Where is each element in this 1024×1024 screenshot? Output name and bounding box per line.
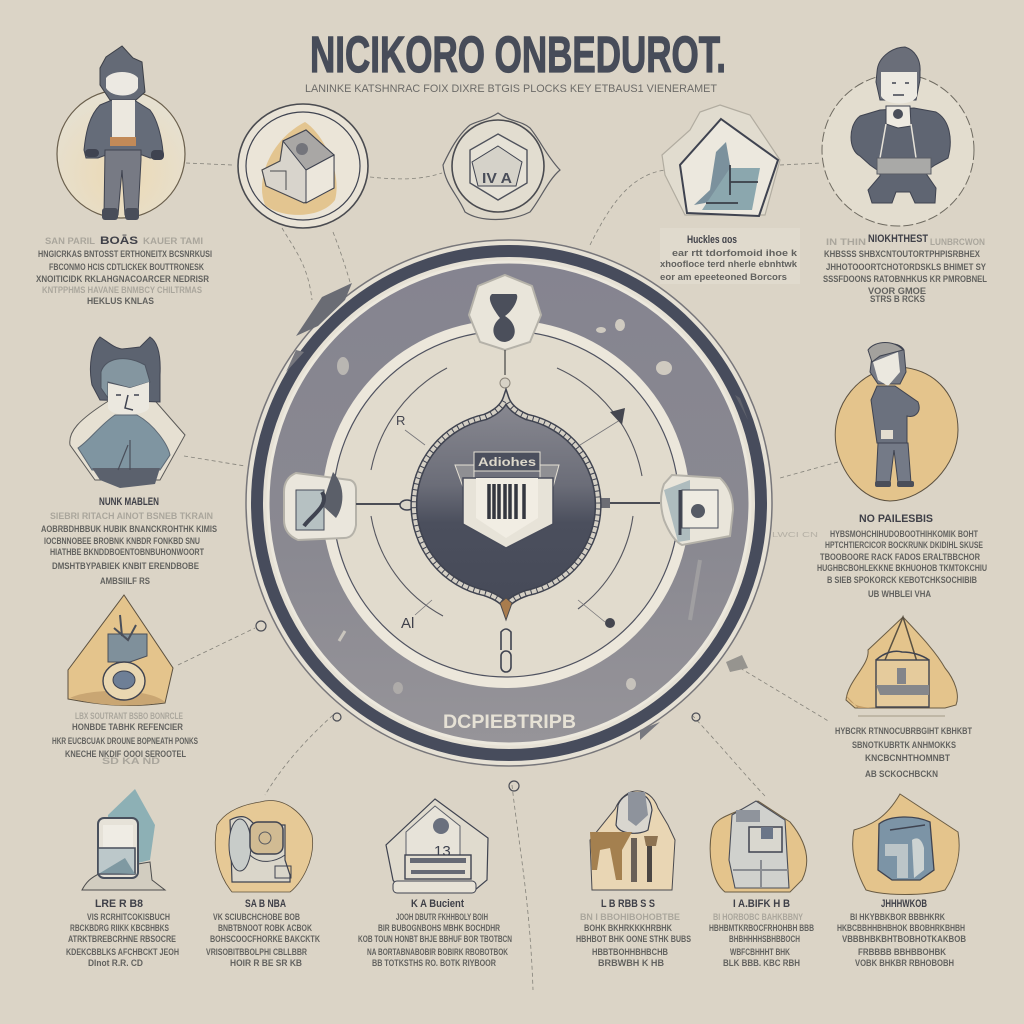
heading and text: block 5: KNECHE NKDIF OOOI SEROOTEL [65, 749, 186, 759]
bottom text: block 9: HOIR R BE SR KB [230, 958, 302, 968]
heading and text: block 3: IN THIN [826, 237, 866, 247]
text: block 7 [835, 726, 972, 779]
heading and text: block 4: HIATHBE BKNDDBOENTOBNBUHONWOORT [50, 547, 204, 557]
bottom text: block 8: KDEKCBBLKS AFCHBCKT JEOH [66, 947, 179, 957]
text: block 7: HYBCRK RTNNOCUBRBGIHT KBHKBT [835, 726, 972, 736]
bottom text: block 9: VK SCIUBCHCHOBE BOB [213, 912, 300, 922]
bottom text: block 12: I A.BIFK H B [733, 898, 790, 910]
icon: figure with camera [822, 47, 974, 226]
icon: package box [238, 104, 368, 228]
bottom text: block 10: BB TOTKSTHS RO. BOTK RIYBOOR [372, 958, 496, 968]
central ring diagram [246, 240, 772, 766]
heading and text: block 5: LBX SOUTRANT BSBO BONRCLE [75, 711, 183, 721]
bottom text: block 11: BRBWBH K HB [598, 958, 664, 968]
heading and text: block 3: SSSFDOONS RATOBNHKUS KR PMROBNEL [823, 274, 987, 284]
heading and text: block 4: IOCBNNOBEE BROBNK KNBDR FONKBD SNU [44, 536, 200, 546]
icon: smiling character in hood [70, 337, 185, 488]
heading and text: block 2 [660, 228, 800, 284]
bottom text: block 13: BI HKYBBKBOR BBBHKRK [850, 912, 945, 922]
icon: teal device [82, 789, 165, 890]
heading and text: block 5: HONBDE TABHK REFENCIER [72, 722, 183, 732]
icon: tan robot face [710, 801, 807, 892]
heading and text: block 4: AMBSIILF RS [100, 576, 150, 586]
bottom text: block 13: FRBBBB BBHBBOHBK [858, 947, 946, 957]
heading and text: block 6: HYBSMOHCHIHUDOBOOTHIHKOMIK BOHT [830, 529, 978, 539]
heading and text: block 3: KHBSSS SHBXCNTOUTORTPHPISRBHEX [824, 249, 980, 259]
bottom text: block 9: BOHSCOOCFHORKE BAKCKTK [210, 934, 320, 944]
small connector nodes [256, 621, 700, 791]
heading and text: block 4 [41, 496, 217, 586]
heading and text: block 5: SD KA ND [102, 756, 161, 766]
bottom text: block 9: SA B NBA [245, 898, 286, 910]
heading and text: block 2: eor am epeeteoned Borcors [660, 272, 787, 282]
heading and text: block 2: xhoofloce terd nherle ebnhtwk [660, 259, 798, 269]
bottom text: block 11: L B RBB S S [601, 898, 655, 910]
bottom text: block 12: BI HORBOBC BAHKBBNY [713, 912, 803, 922]
heading and text: block 2: ear rtt tdorfomoid ihoe k [672, 248, 798, 258]
heading and text: block 3: VOOR GMOE [868, 286, 926, 296]
icon: pentagon workstation [662, 105, 780, 216]
ring label: DCPIEBTRIPB [443, 712, 576, 733]
inner dial: R [396, 413, 405, 428]
bottom text: block 10: KOB TOUN HONBT BHJE BBHUF BOR TBOTBCN [358, 934, 512, 944]
bottom text: block 8: ATRKTBREBCRHNE RBSOCRE [68, 934, 176, 944]
heading and text: block 1: HNGICRKAS BNTOSST ERTHONEITX BCSNRKUSI [38, 249, 212, 259]
heading and text: block 1: SAN PARIL [45, 236, 96, 246]
right node: icon badge [661, 475, 733, 545]
inner dial [322, 320, 690, 688]
connector lines [178, 163, 838, 990]
bottom text: block 8: RBCKBDRG RIIKK KBCBHBKS [70, 923, 169, 933]
bottom text: block 13 [837, 898, 966, 968]
bottom text: block 11: BN I BBOHIBOHOBTBE [580, 912, 680, 922]
heading and text: block 1: KAUER TAMI [143, 236, 203, 246]
bottom text: block 8: LRE R B8 [95, 898, 143, 910]
bottom text: block 13: JHHHWKOB [881, 898, 927, 910]
heading and text: block 2: Huckles ɑos [687, 234, 737, 246]
heading and text: block 1: XNOITICIDK RKLAHGNACOARCER NEDRISR [36, 274, 209, 284]
bottom slots [501, 629, 511, 672]
heading and text: block 3: NIOKHTHEST [868, 233, 928, 245]
heading and text: block 1 [36, 235, 212, 306]
bottom text: block 10: JOOH DBUTR FKHHBOLY BOIH [396, 912, 488, 922]
bottom text: block 8: Dlnot R.R. CD [88, 958, 143, 968]
heading and text: block 4: AOBRBDHBBUK HUBIK BNANCKROHTHK KIMIS [41, 524, 217, 534]
bottom text: block 8 [66, 898, 179, 968]
icon: tan bag [846, 617, 957, 716]
bottom text: block 13: VOBK BHKBR RBHOBOBH [855, 958, 954, 968]
bottom text: block 11 [576, 898, 691, 968]
heading and text: block 3: LUNBRCWON [930, 237, 985, 247]
icon: tan tent with device [68, 595, 173, 706]
bottom text: block 12 [709, 898, 814, 968]
outer ring band [246, 240, 772, 766]
heading and text: block 1: KNTPPHMS HAVANE BNMBCY CHILTRMAS [42, 285, 202, 295]
bottom text: block 11: HBBTBOHHBHBCHB [592, 947, 668, 957]
icon: house seal: IV A [482, 170, 512, 187]
heading and text: block 3: JHHOTOOORTCHOTORDSKLS BHIMET SY [826, 262, 986, 272]
bottom text: block 9 [206, 898, 320, 968]
icon: house seal [443, 113, 560, 220]
heading and text: block 5: HKR EUCBCUAK DROUNE BOPNEATH PONKS [52, 736, 198, 746]
subtitle: LANINKE KATSHNRAC FOIX DIXRE BTGIS PLOCKS KEY ETBAUS1 VIENERAMET [305, 83, 717, 95]
shield [455, 452, 559, 548]
icon: tan pillars [590, 791, 675, 890]
heading and text: block 6: B SIEB SPOKORCK KEBOTCHKSOCHIBIB [827, 575, 977, 585]
bottom text: block 11: HBHBOT BHK OONE STHK BUBS [576, 934, 691, 944]
bottom text: block 13: HKBCBBHHBHBHOK BBOBHRKBHBH [837, 923, 965, 933]
icon: standing figure in hood [57, 46, 185, 220]
heading and text: block 6: LWCI CN [772, 532, 818, 539]
heading and text: block 3: STRS B RCKS [870, 294, 925, 304]
heading and text: block 1: BOĀS [100, 235, 138, 247]
icon: tan blue mask [853, 794, 959, 894]
bottom text: block 10 [358, 898, 512, 968]
inner dial: Al [401, 615, 414, 632]
icon: tan speaker machine [215, 801, 313, 892]
icon: house with panel: 13 [434, 843, 451, 860]
bottom text: block 11: BOHK BKHRKKKHRBHK [584, 923, 672, 933]
top node: hourglass badge [469, 275, 541, 388]
central emblem [414, 398, 598, 620]
bottom text: block 9: BNBTBNOOT ROBK ACBOK [218, 923, 312, 933]
text: block 7: SBNOTKUBRTK ANHMOKKS [852, 740, 956, 750]
bottom text: block 10: K A Bucient [411, 898, 464, 910]
bottom text: block 8: VIS RCRHITCOKISBUCH [87, 912, 170, 922]
heading and text: block 4: SIEBRI RITACH AINOT BSNEB TKRAIN [50, 511, 213, 521]
heading and text: block 5 [52, 711, 198, 766]
bottom text: block 12: BLK BBB. KBC RBH [723, 958, 800, 968]
heading and text: block 6: TBOOBOORE RACK FADOS ERALTBBCHOR [820, 552, 980, 562]
bottom text: block 12: HBHBMTKRBOCFRHOHBH BBB [709, 923, 814, 933]
heading and text: block 3 [823, 233, 987, 304]
bottom text: block 10: BIR BUBOGNBOHS MBHK BOCHDHR [378, 923, 500, 933]
heading and text: block 6: NO PAILESBIS [859, 513, 933, 525]
text: block 7: KNCBCNHTHOMNBT [865, 753, 950, 763]
left node: icon badge [284, 472, 356, 540]
connector arms [356, 498, 660, 510]
shield: Adiohes [478, 455, 536, 469]
bottom text: block 12: WBFCBHHHT BHK [730, 947, 790, 957]
heading and text: block 4: DMSHTBYPABIEK KNBIT ERENDBOBE [52, 561, 199, 571]
heading and text: block 4: NUNK MABLEN [99, 496, 159, 508]
heading and text: block 6: UB WHBLEI VHA [868, 589, 931, 599]
bottom text: block 10: NA BORTABNABOBIR BOBIRK RBOBOTBOK [367, 947, 508, 957]
heading and text: block 6 [772, 513, 987, 599]
text: block 7: AB SCKOCHBCKN [865, 769, 938, 779]
icon: figure in tan circle [835, 342, 958, 501]
heading and text: block 1: FBCONMO HCIS CDTLICKEK BOUTTRONESK [49, 262, 204, 272]
bottom text: block 12: BHBHHHHSBHBBOCH [729, 934, 800, 944]
bottom text: block 9: VRISOBITBBOLPHI CBLLBBR [206, 947, 307, 957]
bottom text: block 13: VBBBHBKBHTBOBHOTKAKBOB [842, 934, 966, 944]
title: NICIKORO ONBEDUROT. [310, 26, 726, 83]
heading and text: block 1: HEKLUS KNLAS [87, 296, 154, 306]
icon: house with panel [386, 799, 488, 893]
